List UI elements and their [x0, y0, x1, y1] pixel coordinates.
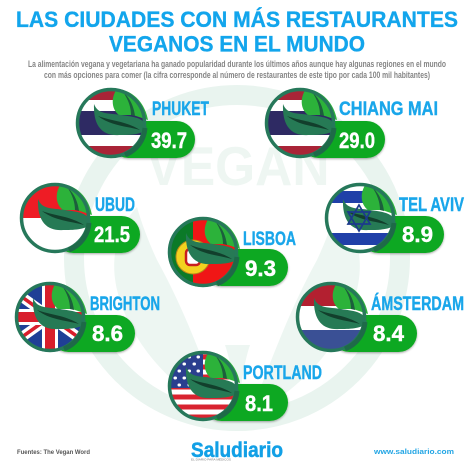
- city badge: Tel Aviv: [325, 183, 464, 253]
- city badge: Chiang Mai: 29.0: [339, 128, 375, 153]
- city badge: Chiang Mai: CHIANG MAI: [339, 98, 438, 120]
- city badge: Brighton: 8.6: [92, 321, 123, 346]
- city badge: Brighton: BRIGHTON: [90, 293, 160, 315]
- background vegan emblem: [74, 95, 400, 421]
- logo: Saludiario: Saludiario: [191, 439, 283, 462]
- title: LAS CIUDADES CON MÁS RESTAURANTES: [16, 7, 458, 32]
- city badge: Ubud: 21.5: [94, 222, 130, 247]
- city badge: Phuket: [76, 88, 209, 158]
- city badge: Lisboa: 9.3: [245, 256, 276, 281]
- sources note: Fuentes: The Vegan Word: [17, 449, 90, 456]
- city badge: Lisboa: [168, 217, 296, 287]
- city badge: Chiang Mai: [265, 88, 438, 158]
- logo: Saludiario: EL DIARIO PARA MÉDICOS: [191, 458, 231, 462]
- city badge: Ámsterdam: [296, 282, 464, 352]
- city badge: Portland: [168, 351, 322, 421]
- city badge: Portland: PORTLAND: [243, 362, 322, 384]
- website url: www.saludiario.com: [373, 447, 454, 456]
- city badge: Brighton: [15, 282, 160, 352]
- city badge: Ubud: UBUD: [95, 194, 135, 216]
- intro text: [28, 59, 446, 80]
- city badge: Phuket: 39.7: [151, 128, 187, 153]
- city badge: Portland: 8.1: [245, 391, 273, 416]
- city badge: Phuket: PHUKET: [152, 98, 209, 120]
- background vegan emblem: VEGAN: [146, 135, 330, 197]
- title: VEGANOS EN EL MUNDO: [109, 32, 365, 56]
- city badge: Ubud: [20, 183, 140, 253]
- city badge: Tel Aviv: 8.9: [402, 222, 433, 247]
- city badge: Lisboa: LISBOA: [243, 228, 296, 250]
- city badge: Ámsterdam: 8.4: [373, 321, 404, 346]
- title: [16, 7, 458, 56]
